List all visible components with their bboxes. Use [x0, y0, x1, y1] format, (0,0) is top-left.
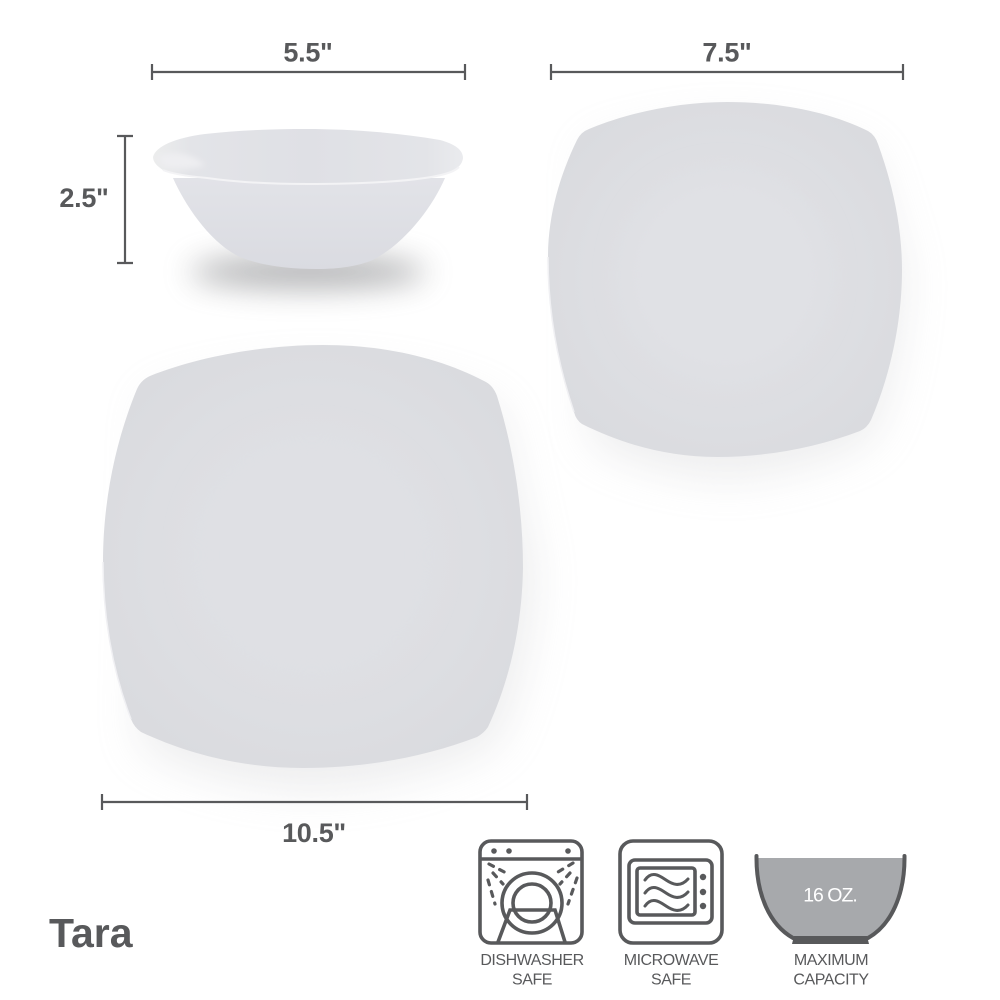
icon: bowl maximum capacity 16 oz [756, 856, 905, 944]
label: dishwasher safe: SAFE [512, 972, 552, 988]
dimension: bowl height 2.5 inches [59, 136, 133, 263]
photo: bowl [153, 129, 463, 289]
label: microwave safe: MICROWAVE [624, 952, 718, 969]
dimension: bowl width 5.5 inches [152, 38, 465, 80]
label: maximum capacity: CAPACITY [793, 972, 869, 988]
label: maximum capacity: MAXIMUM [794, 952, 868, 969]
dimension: large plate width 10.5 inches: 10.5" [282, 818, 346, 848]
dimension: small plate width 7.5 inches [551, 38, 903, 80]
photo: small square plate [548, 102, 905, 478]
icon: microwave safe [620, 841, 722, 943]
dimension: bowl width 5.5 inches: 5.5" [283, 38, 333, 68]
product name: Tara [49, 910, 134, 956]
icon: dishwasher safe [480, 841, 582, 943]
icon: bowl maximum capacity 16 oz: 16 OZ. [803, 884, 857, 906]
photo: large square plate [103, 345, 535, 790]
dimension: large plate width 10.5 inches [102, 794, 527, 848]
dimension: small plate width 7.5 inches: 7.5" [702, 38, 752, 68]
dimension: bowl height 2.5 inches: 2.5" [59, 183, 109, 213]
label: dishwasher safe: DISHWASHER [480, 952, 584, 969]
label: microwave safe: SAFE [651, 972, 691, 988]
